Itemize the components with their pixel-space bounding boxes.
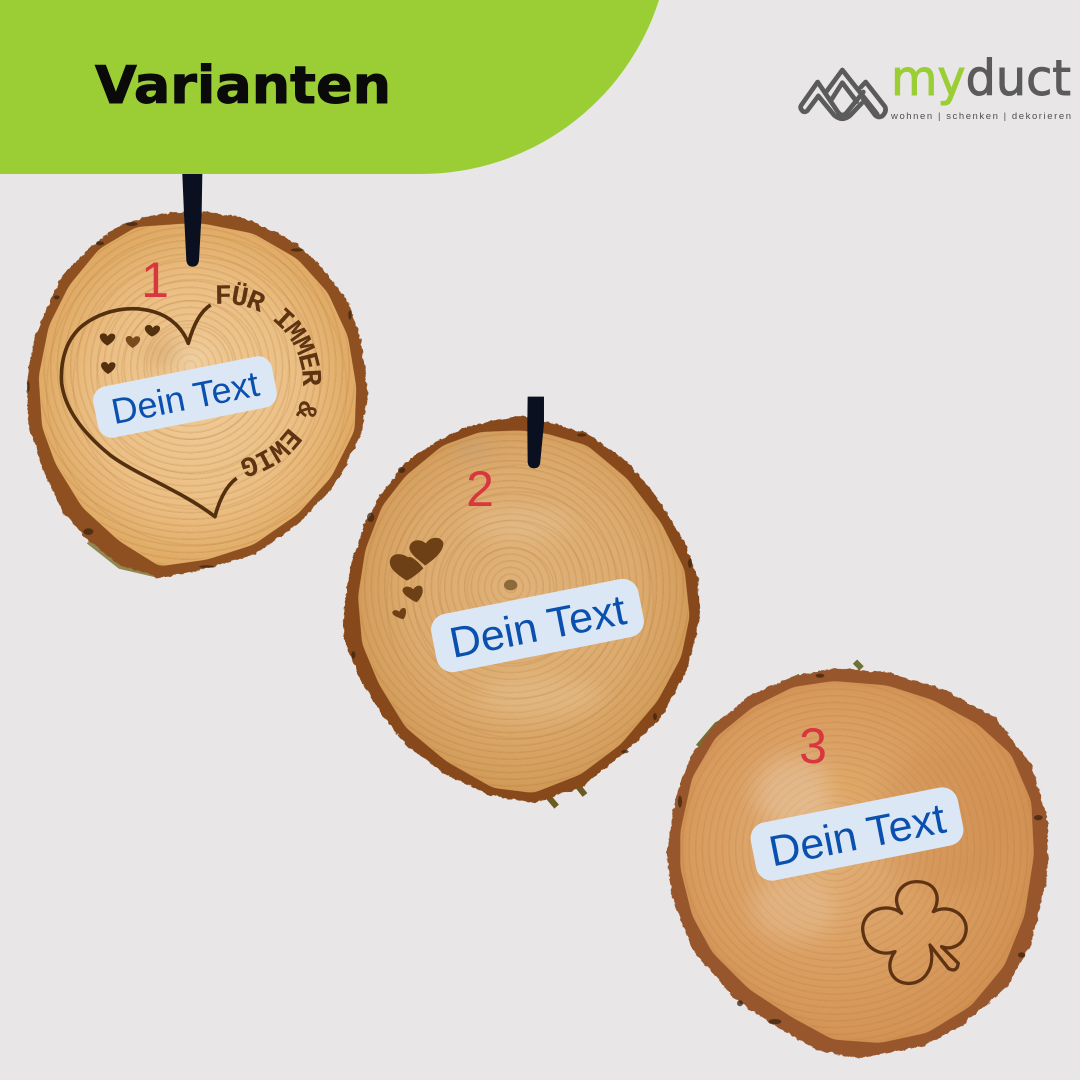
bark knots 1 — [27, 222, 352, 568]
hanging ribbon 1 — [182, 174, 202, 267]
tree rings 3 — [682, 686, 1030, 1040]
title: Varianten — [95, 56, 391, 116]
number 3: 3 — [799, 718, 827, 774]
moss 1 — [88, 542, 160, 576]
logo wordmark: myduct — [891, 50, 1071, 107]
hanging ribbon 2 — [527, 397, 544, 468]
logo tagline: wohnen | schenken | dekorieren — [890, 111, 1071, 122]
number 1: 1 — [141, 252, 169, 308]
bark knots 2 — [351, 433, 692, 753]
text label 3 — [748, 785, 966, 883]
number 2: 2 — [466, 461, 494, 517]
text label 1: Dein Text — [108, 363, 262, 432]
variant 2: wood slice — [340, 397, 707, 807]
bark rim 3 — [668, 670, 1047, 1057]
moss 3 — [698, 662, 862, 747]
wood face 3 — [682, 682, 1033, 1042]
logo icon: mountains — [801, 70, 886, 119]
text label 2 — [428, 576, 647, 675]
text label 1 — [91, 354, 279, 440]
logo: myduct — [801, 50, 1071, 122]
text label 2: Dein Text — [446, 586, 630, 668]
wood face 1 — [40, 225, 355, 565]
variant 3: wood slice — [667, 662, 1047, 1058]
bark rim 2 — [345, 417, 698, 802]
tree rings 2 — [362, 434, 688, 792]
bark rim 1 — [28, 213, 367, 577]
curved engraved text: FÜR IMMER & EWIG — [217, 282, 322, 476]
engraved hearts 2 — [390, 538, 443, 619]
bark knots 3 — [678, 674, 1043, 1024]
clover engraving — [863, 882, 966, 983]
moss 2 — [547, 787, 585, 807]
small engraved hearts — [100, 325, 160, 374]
tree rings 1 — [42, 227, 355, 564]
variant 1: wood slice — [26, 174, 369, 578]
wood face 2 — [359, 432, 688, 792]
heart outline engraving — [61, 305, 237, 517]
text label 3: Dein Text — [765, 795, 950, 876]
green header shape — [0, 0, 659, 174]
